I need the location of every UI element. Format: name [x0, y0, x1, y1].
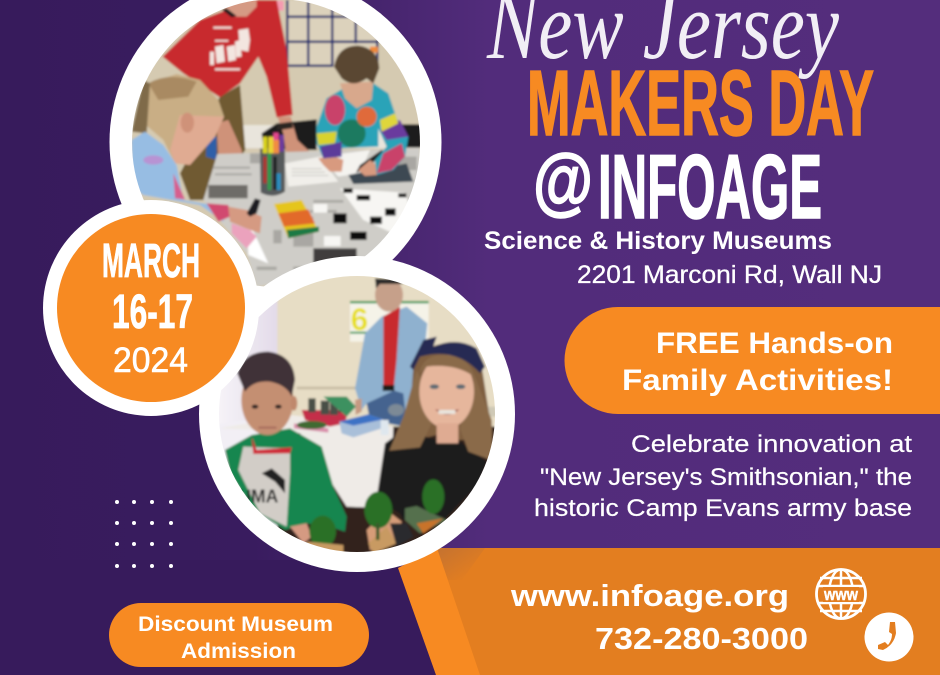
description text: Celebrate innovation at — [631, 431, 912, 458]
description text: historic Camp Evans army base — [534, 495, 912, 522]
icon: phone — [864, 612, 914, 662]
venue text: 2201 Marconi Rd, Wall NJ — [577, 261, 882, 289]
description text — [534, 431, 912, 522]
discount admission pill: Discount Museum — [138, 613, 333, 636]
free activities banner: Family Activities! — [622, 364, 893, 397]
icon: globe www — [816, 570, 866, 618]
date badge: 2024 — [113, 341, 188, 380]
icon: globe www: www — [823, 585, 859, 604]
date badge: 16-17 — [112, 286, 193, 339]
discount admission pill — [109, 603, 369, 667]
venue text: Science & History Museums — [484, 227, 832, 255]
photo circle: model makers: UMA — [238, 486, 278, 507]
venue text — [484, 227, 882, 289]
panel: bottom left dark corner — [0, 560, 436, 675]
panel: orange contact band — [398, 548, 940, 675]
title: @InfoAge — [533, 137, 822, 238]
photo circle: model makers: 6 — [351, 302, 368, 337]
title: @InfoAge: @ — [533, 138, 593, 222]
photo circle: makers at table — [110, 0, 442, 308]
photo circle: model makers — [190, 256, 523, 572]
free activities banner — [564, 307, 940, 414]
description text: "New Jersey's Smithsonian," the — [540, 464, 912, 491]
date badge: MARCH — [102, 235, 200, 288]
decorative dot grid — [115, 500, 173, 568]
website: www.infoage.org — [510, 578, 789, 613]
free activities banner: FREE Hands-on — [656, 327, 893, 360]
phone number: 732-280-3000 — [595, 621, 808, 656]
date badge — [43, 200, 259, 416]
discount admission pill: Admission — [181, 640, 296, 663]
